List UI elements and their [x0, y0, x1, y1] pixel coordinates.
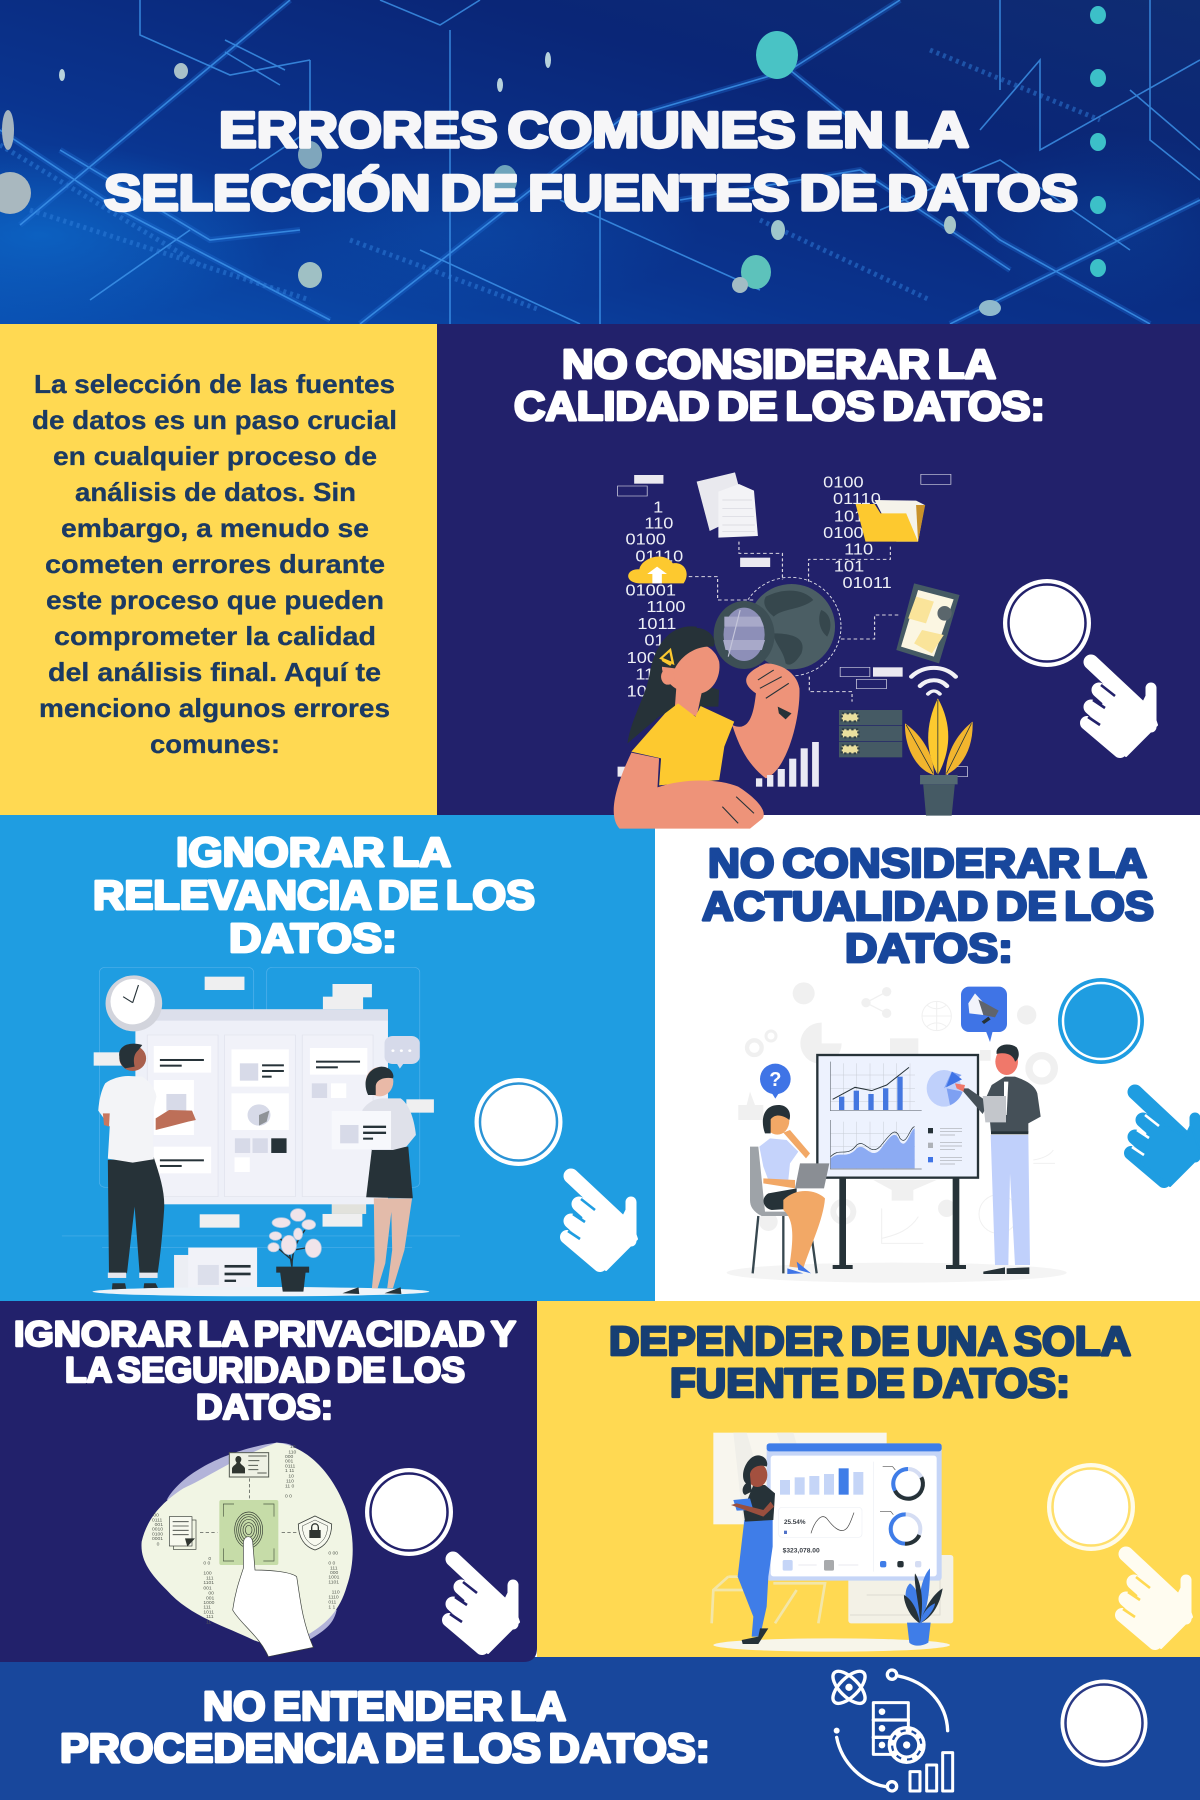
icon: data processing cycle [828, 1666, 953, 1791]
binary digits: 0111 [152, 1517, 163, 1523]
id card [229, 1453, 269, 1477]
donut charts [893, 1469, 923, 1498]
panel: actualidad background [655, 815, 1200, 1301]
binary digits: 001 [155, 1522, 163, 1528]
binary digits: 0001 [152, 1536, 163, 1542]
binary digits: 111 [203, 1605, 211, 1611]
magnifier [714, 601, 775, 669]
cycle arrows [835, 1670, 948, 1791]
binary columns: 1 [653, 499, 663, 516]
potted plant [268, 1209, 321, 1292]
heading: privacidad: DATOS: [196, 1388, 333, 1427]
heading: relevancia [93, 829, 535, 961]
intro text: comunes: [150, 729, 280, 759]
binary digits: 001 [203, 1585, 212, 1591]
blob background [141, 1443, 353, 1644]
standing man [955, 1045, 1041, 1274]
illustration: actualidad presentation [727, 982, 1067, 1283]
binary columns: 100 [627, 649, 657, 667]
folder [856, 500, 925, 542]
intro text: embargo, a menudo se [61, 513, 369, 543]
binary digits: 0100 [152, 1531, 163, 1537]
binary digits: 0010 [152, 1527, 163, 1533]
heading: procedencia: PROCEDENCIA DE LOS DATOS: [60, 1725, 710, 1771]
binary columns: 01110 [833, 490, 881, 508]
globe [740, 577, 841, 676]
intro text: en cualquier proceso de [53, 441, 377, 471]
panel: relevancia background [0, 815, 655, 1301]
binary digits: 110 [288, 1449, 297, 1455]
pointing hand: privacidad [449, 1559, 519, 1653]
server [873, 1703, 908, 1754]
floor [93, 1287, 429, 1296]
panel: dependencia background [537, 1301, 1200, 1659]
shield icon [298, 1516, 332, 1550]
heading: procedencia: NO ENTENDER LA [203, 1683, 566, 1729]
heading: actualidad [702, 840, 1154, 971]
binary digits: 110 [332, 1589, 340, 1595]
panel: introduction [0, 324, 437, 815]
binary digits: 00 [153, 1513, 159, 1519]
presentation board [817, 1055, 978, 1269]
binary digits: 0 0 [203, 1561, 210, 1567]
seated woman [750, 1105, 829, 1274]
heading: privacidad [14, 1315, 516, 1427]
binary columns: 110 [844, 541, 873, 558]
heading: calidad: CALIDAD DE LOS DATOS: [514, 383, 1045, 429]
illustration: fingerprint privacy [141, 1443, 353, 1657]
finger hand [233, 1537, 313, 1657]
binary digits: 11 [206, 1619, 211, 1625]
plant [905, 698, 973, 816]
binary digits: 0 0 [285, 1493, 292, 1499]
binary digits: 1 1 [328, 1605, 335, 1611]
intro text: de datos es un paso crucial [32, 405, 397, 435]
binary digits: 0 [157, 1541, 160, 1547]
binary digits: 00 [208, 1591, 214, 1597]
binary columns: 01110 [635, 548, 683, 565]
heading: actualidad: ACTUALIDAD DE LOS [702, 883, 1154, 929]
woman with document [332, 1067, 416, 1294]
magnifier lens: dependencia [1047, 1463, 1135, 1551]
title: ERRORES COMUNES EN LA [219, 102, 969, 158]
binary digits: 000 [285, 1454, 294, 1460]
tablet [896, 583, 960, 663]
heading: calidad: NO CONSIDERAR LA [562, 341, 996, 387]
wifi signal [911, 668, 956, 694]
binary digits: 0 [208, 1556, 211, 1562]
binary digits: 11 0 [285, 1483, 295, 1489]
binary digits: 0 00 [328, 1551, 338, 1557]
heading: actualidad: NO CONSIDERAR LA [708, 840, 1147, 886]
binary digits: 0111 [285, 1463, 296, 1469]
header banner [0, 0, 1200, 325]
illustration: dashboard with woman [712, 1433, 953, 1652]
binary columns: 01001 [625, 582, 676, 599]
data labels [618, 474, 967, 777]
binary digits: 100 [203, 1571, 212, 1577]
magnifier lens: actualidad [1058, 978, 1144, 1064]
panel: procedencia background [0, 1657, 1200, 1800]
panel: privacidad background [0, 1301, 537, 1662]
intro text: menciono algunos errores [39, 693, 390, 723]
heading: dependencia: DEPENDER DE UNA SOLA [609, 1318, 1131, 1364]
binary digits: 1101 [203, 1580, 214, 1586]
connectors [200, 1478, 298, 1532]
woman [614, 626, 800, 829]
binary columns: 110 [644, 515, 673, 532]
heading: calidad [514, 341, 1045, 429]
binary columns: 1100 [646, 598, 686, 616]
binary columns: 101 [834, 558, 864, 575]
title: SELECCIÓN DE FUENTES DE DATOS [104, 165, 1078, 221]
binary digits: 111 [330, 1565, 338, 1571]
question bubble: ? [769, 1069, 781, 1091]
binary digits: 1001 [328, 1575, 340, 1581]
binary digits: 1 11 [285, 1468, 295, 1474]
intro text [32, 369, 397, 759]
woman with tablet [731, 1455, 775, 1644]
heading: dependencia: FUENTE DE DATOS: [670, 1360, 1070, 1406]
pointing hand: relevancia [567, 1176, 637, 1270]
binary digits: 001 [285, 1459, 294, 1465]
intro text: este proceso que pueden [46, 585, 384, 615]
wall clock [106, 975, 162, 1031]
server rack [839, 710, 902, 757]
bar chart [756, 742, 819, 787]
binary digits: 10 [290, 1444, 296, 1450]
upload cloud [628, 556, 687, 583]
magnifier lens: calidad [1003, 579, 1091, 667]
atom [828, 1666, 870, 1709]
dashboard: $323,078.00 [783, 1548, 820, 1555]
heading: relevancia: IGNORAR LA [176, 829, 451, 875]
document icon [169, 1517, 196, 1549]
binary digits: 1000 [203, 1600, 215, 1606]
binary digits: 1011 [203, 1609, 214, 1615]
heading: privacidad: IGNORAR LA PRIVACIDAD Y [14, 1315, 516, 1354]
intro text: cometen errores durante [45, 549, 385, 579]
binary columns: 10 [627, 683, 647, 700]
megaphone bubble [961, 987, 1007, 1042]
binary digits: 10 [288, 1473, 294, 1479]
intro text: del análisis final. Aquí te [48, 657, 381, 687]
heading: procedencia [60, 1683, 710, 1771]
binary columns: 0100 [823, 524, 864, 542]
binary columns: 1011 [637, 615, 676, 633]
magnifier lens: privacidad [365, 1468, 453, 1556]
dashed connectors [689, 542, 898, 702]
speech bubble [385, 1036, 420, 1069]
binary digits: 111 [206, 1614, 214, 1620]
binary columns [625, 474, 892, 700]
dashboard: 25.54% [784, 1519, 806, 1526]
binary columns: 0100 [625, 531, 666, 548]
man with papers [98, 1044, 196, 1293]
back panels [712, 1433, 953, 1623]
blue plant [904, 1568, 943, 1646]
faded background icons [738, 982, 1055, 1243]
intro text: análisis de datos. Sin [75, 477, 356, 507]
binary digits: 1101 [328, 1579, 339, 1585]
network nodes [0, 6, 1106, 316]
binary columns: 0100 [823, 474, 864, 491]
binary columns: 01011 [843, 574, 892, 592]
heading: dependencia [609, 1318, 1131, 1406]
binary digits [152, 1444, 340, 1625]
heading: relevancia: DATOS: [229, 915, 397, 961]
intro text: comprometer la calidad [54, 621, 376, 651]
pointing hand: calidad [1087, 662, 1157, 756]
bars [910, 1753, 953, 1791]
binary digits: 0 0 [328, 1561, 335, 1567]
heading: actualidad: DATOS: [845, 925, 1013, 971]
binary columns: 11 [635, 666, 654, 683]
heading: privacidad: LA SEGURIDAD DE LOS [65, 1351, 465, 1390]
binary columns: 01 [644, 632, 665, 649]
binary digits: 000 [330, 1570, 339, 1576]
magnifier lens: procedencia [1060, 1680, 1148, 1766]
gear [889, 1728, 924, 1762]
kanban board [135, 1009, 388, 1204]
binary digits: 110 [286, 1479, 294, 1485]
binary digits: 111 [206, 1575, 214, 1581]
binary digits: 011 [328, 1599, 337, 1605]
binary columns: 101 [834, 508, 864, 525]
pointing hand: dependencia [1122, 1554, 1192, 1648]
heading: relevancia: RELEVANCIA DE LOS [93, 872, 535, 918]
panel: calidad background [437, 324, 1200, 815]
binary digits: 1110 [328, 1595, 339, 1601]
magnifier lens: relevancia [474, 1078, 562, 1166]
lower documents [174, 1248, 257, 1289]
dashboard [767, 1443, 942, 1581]
fingerprint pad [219, 1500, 278, 1565]
question bubble [760, 1064, 791, 1099]
documents [697, 472, 758, 538]
binary digits: 001 [206, 1595, 215, 1601]
pointing hand: actualidad [1131, 1092, 1200, 1186]
illustration: relevancia team with board [62, 967, 460, 1296]
title [104, 102, 1078, 221]
intro text: La selección de las fuentes [34, 369, 395, 399]
illustration: calidad woman with magnifier [614, 472, 973, 829]
